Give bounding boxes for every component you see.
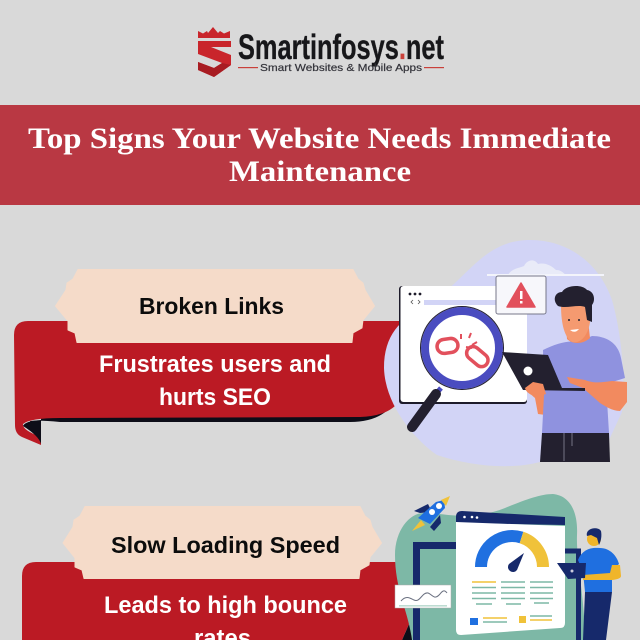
person: [557, 528, 621, 640]
description: Leads to high bounce: [104, 592, 347, 619]
neck and head: [566, 320, 590, 343]
pants: [583, 592, 612, 640]
left forearm: [527, 381, 546, 415]
logo tagline: Smart Websites & Mobile Apps: [260, 62, 422, 74]
person: [502, 286, 627, 462]
rocket: [412, 496, 450, 531]
panel: broken links: [14, 270, 400, 445]
cloud: [487, 260, 604, 276]
monitor frame: [416, 546, 578, 640]
hand on laptop: [525, 382, 546, 397]
logo wordmark: Smartinfosys.net: [238, 28, 444, 67]
shirt: [578, 548, 619, 592]
title: Maintenance: [229, 155, 411, 188]
warning box: [496, 276, 546, 314]
background blob: [384, 240, 624, 466]
ribbon: [14, 321, 400, 445]
shirt: [542, 336, 625, 433]
description: [104, 592, 347, 640]
laptop: [502, 352, 585, 391]
description: [99, 351, 331, 411]
report window: [456, 511, 565, 635]
report lines: [472, 582, 553, 622]
arm: [583, 565, 621, 580]
title banner: [0, 105, 640, 205]
laptop: [557, 563, 586, 579]
browser window: [399, 286, 527, 404]
plaque: [63, 506, 382, 578]
title: [28, 122, 611, 188]
ribbon: [22, 562, 413, 640]
hair: [555, 286, 594, 322]
description: Frustrates users and: [99, 351, 331, 378]
title: Top Signs Your Website Needs Immediate: [28, 122, 611, 155]
head: [587, 532, 601, 546]
logo: [198, 27, 444, 77]
icon: broken chain: [436, 333, 491, 369]
right arm: [567, 377, 627, 411]
plaque: [56, 270, 374, 342]
legend swatches: [470, 616, 526, 625]
illustration: broken link inspection: [384, 240, 627, 466]
pants: [540, 433, 610, 462]
description: hurts SEO: [159, 384, 271, 411]
line chart card: [395, 585, 451, 608]
heading: broken links: Broken Links: [139, 293, 284, 319]
illustration: speed dashboard: [395, 494, 621, 640]
magnifier: [412, 306, 504, 427]
icon: shield logo: [198, 27, 231, 77]
background blob: [395, 494, 585, 640]
gauge: [481, 536, 543, 572]
heading: slow loading speed: Slow Loading Speed: [111, 532, 340, 558]
panel: slow loading speed: [22, 506, 413, 640]
